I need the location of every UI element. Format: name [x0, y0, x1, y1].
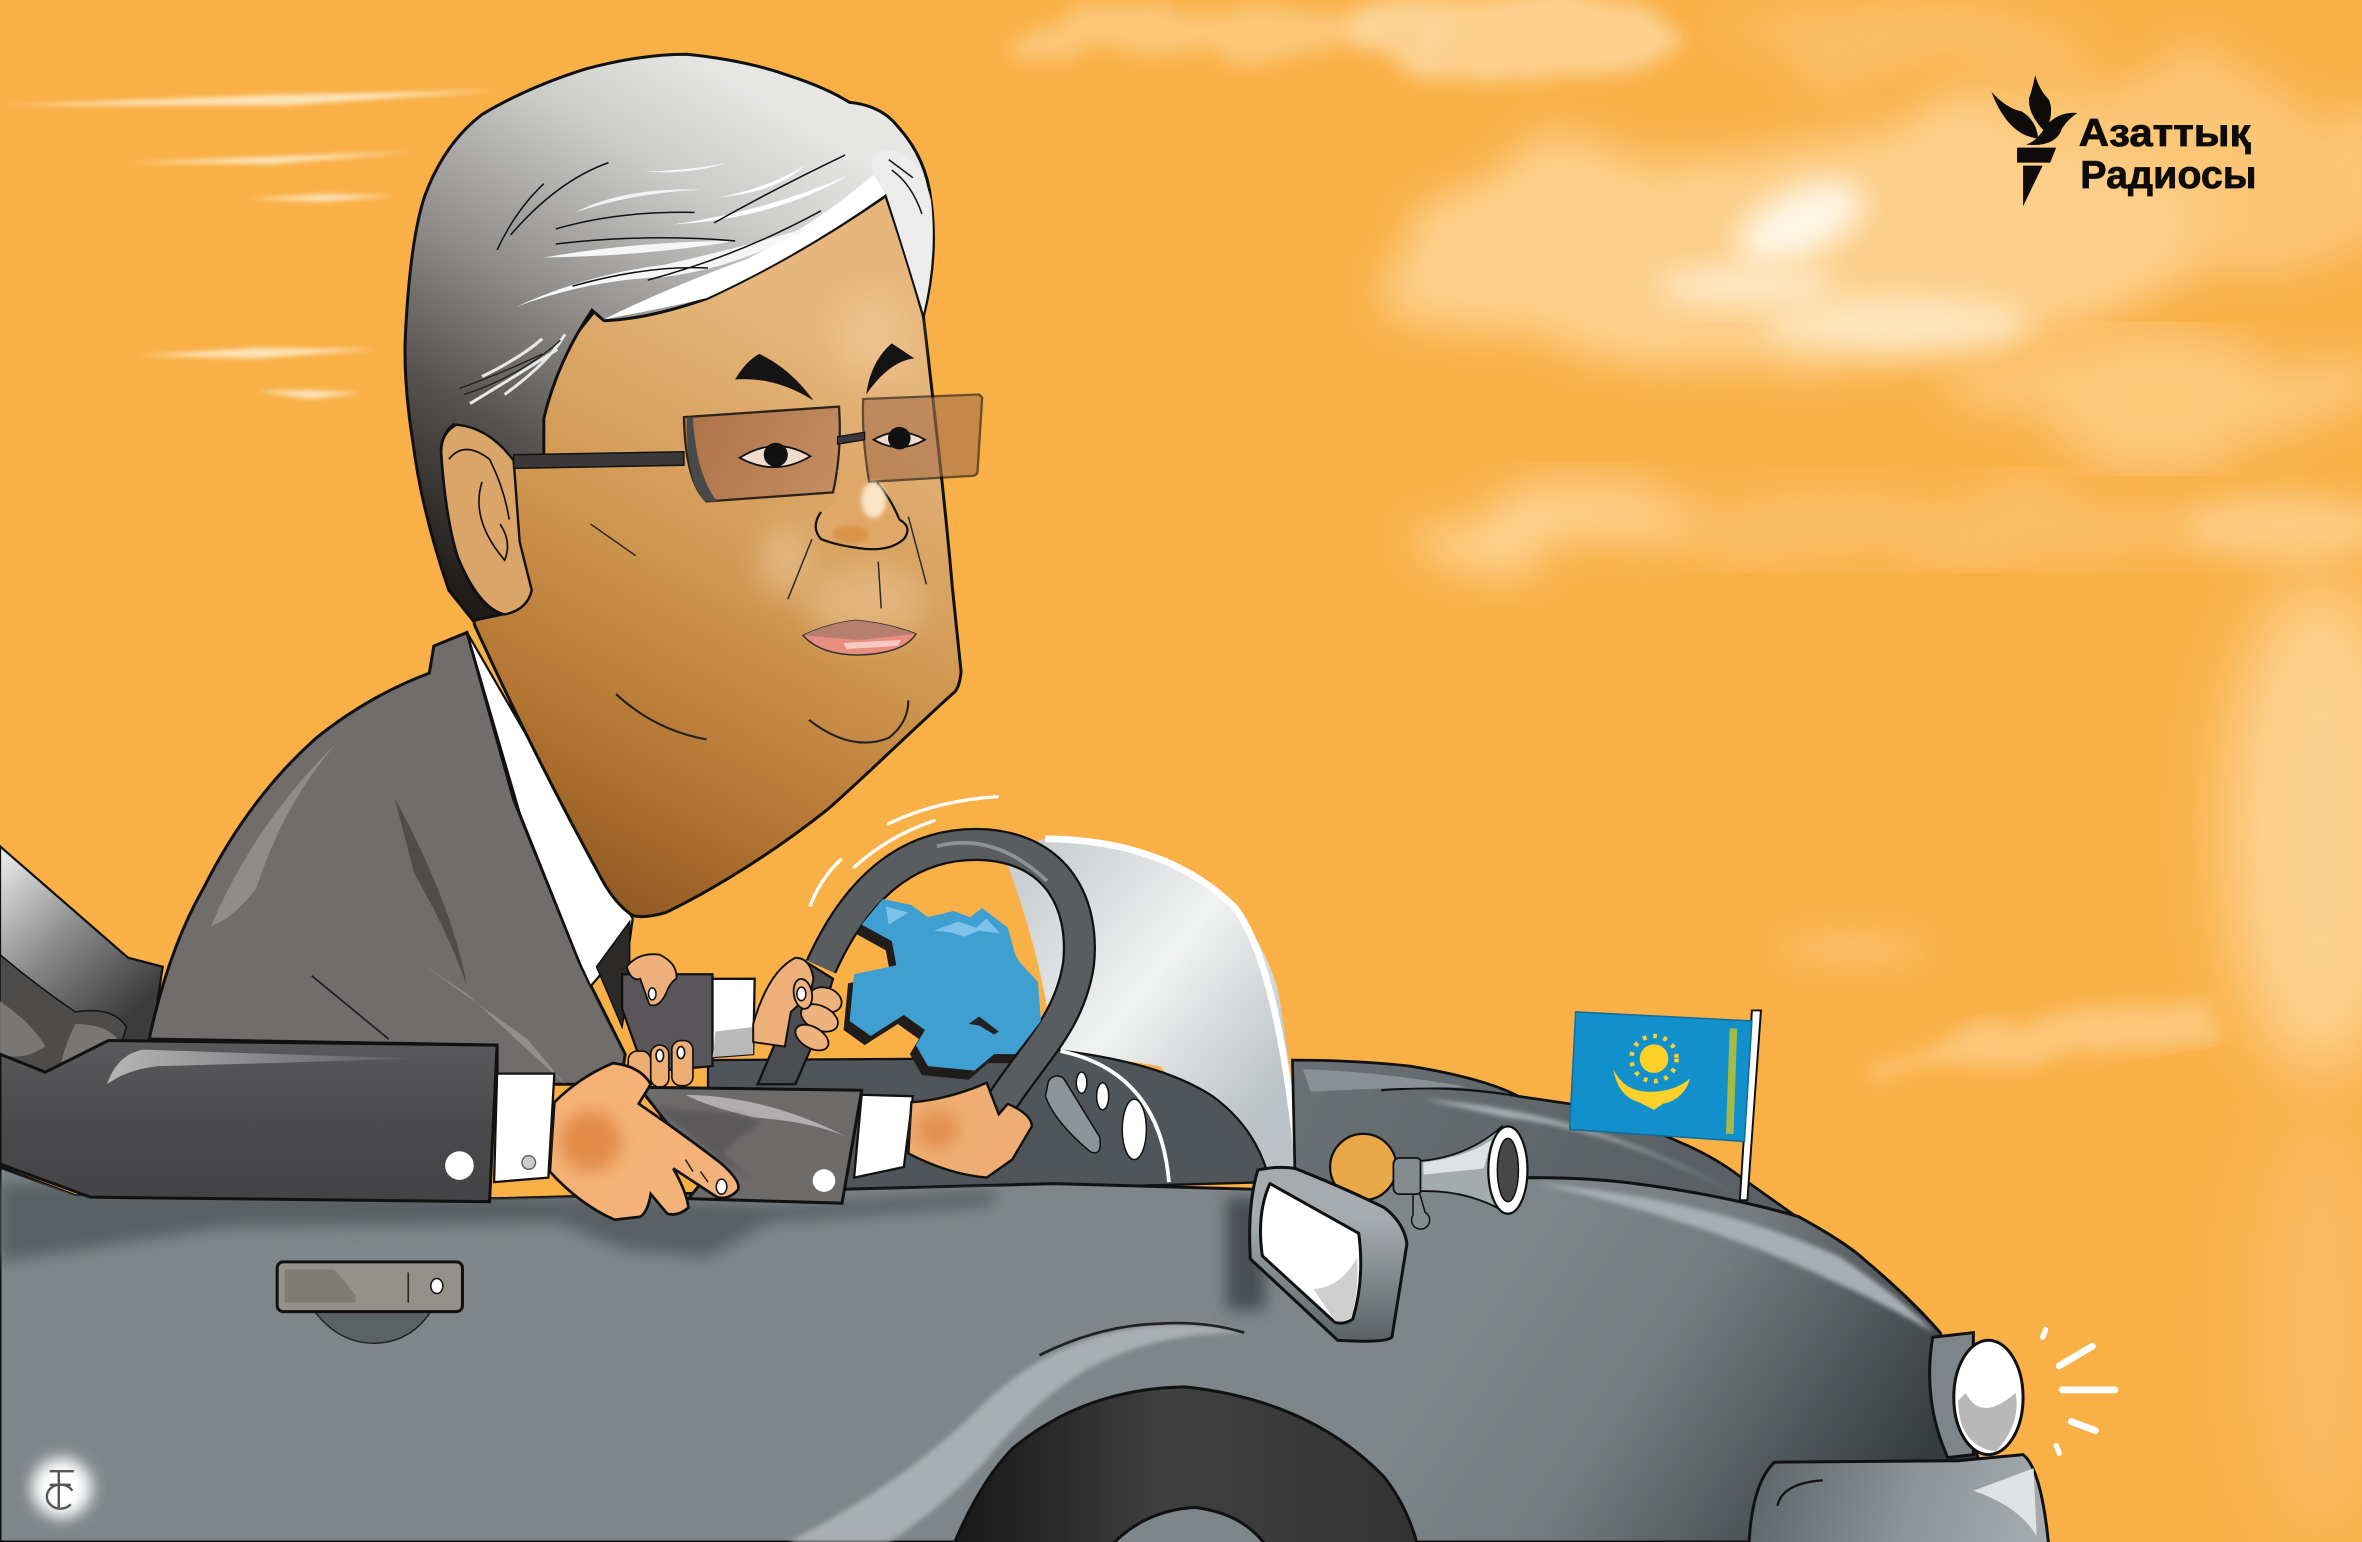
signature stamp	[32, 1458, 92, 1518]
brows	[735, 354, 813, 401]
flag	[1570, 1010, 1761, 1200]
rear passenger arm	[0, 846, 163, 1163]
nose	[816, 470, 907, 549]
jacket	[149, 632, 625, 1084]
logo wordmark	[2079, 112, 2257, 197]
logo wordmark: Азаттық	[2079, 112, 2251, 155]
wheel arch and tyre	[954, 1387, 1418, 1542]
wheel hub	[1112, 1507, 1265, 1542]
hand gripping wheel	[753, 958, 845, 1056]
steering motion lines	[810, 797, 997, 905]
head	[405, 54, 982, 917]
second cuff and right hand	[854, 1083, 1032, 1178]
near hand	[550, 1063, 739, 1220]
tie	[597, 922, 630, 1027]
clouds	[1009, 0, 2362, 1542]
face	[452, 194, 961, 917]
Kazakhstan map on wheel	[844, 899, 1041, 1080]
car hood rear section	[1292, 1060, 1799, 1218]
door handle	[277, 1262, 462, 1343]
fender curve and highlight	[788, 1323, 1244, 1542]
mouth	[803, 620, 916, 655]
headlight	[1930, 1333, 2023, 1458]
hair	[405, 54, 933, 620]
near sleeve	[0, 1041, 497, 1202]
car body	[0, 1167, 2003, 1542]
headlight sparkle	[2043, 1330, 2115, 1453]
bumper	[1749, 1455, 2049, 1542]
logo wordmark: Радиосы	[2080, 154, 2257, 197]
glasses	[514, 395, 982, 501]
chin and jowl lines	[616, 694, 908, 743]
near shirt cuff	[494, 1074, 554, 1182]
shirt and tie	[467, 632, 633, 1027]
upper sleeve and left hand	[622, 954, 755, 1090]
ear	[441, 425, 532, 614]
steering wheel	[758, 843, 1079, 1107]
windshield	[1008, 839, 1298, 1167]
logo: Azattyq Radiosy	[1991, 75, 2257, 206]
fingers over sleeve	[628, 1041, 693, 1090]
flag pole	[1740, 1010, 1761, 1200]
horn	[1393, 1126, 1527, 1229]
right eye	[874, 432, 925, 447]
speed lines	[0, 90, 500, 399]
hair fringe highlights	[459, 151, 933, 404]
horn ball	[1330, 1134, 1396, 1200]
second sleeve	[639, 1087, 862, 1203]
dashboard	[708, 1050, 1270, 1190]
logo torch	[1991, 75, 2077, 206]
wing mirror	[1250, 1167, 1407, 1341]
left eye	[740, 446, 810, 467]
